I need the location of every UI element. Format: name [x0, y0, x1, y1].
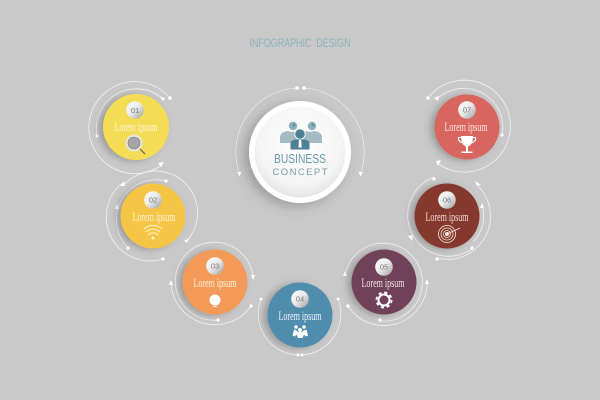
panel: step 01: 01 — [131, 106, 139, 115]
panel: step 01: Lorem ipsum — [114, 120, 158, 134]
panel: step 02: Lorem ipsum — [132, 210, 176, 224]
panel: step 05 — [343, 243, 429, 326]
icon: gear — [376, 292, 392, 308]
panel: step 05: Lorem ipsum — [362, 276, 405, 290]
panel: central business concept — [236, 86, 364, 203]
panel: step 02: 02 — [149, 196, 157, 204]
icon: light bulb — [210, 294, 220, 307]
title: INFOGRAPHIC DESIGN — [250, 36, 350, 50]
icon: magnifier — [126, 134, 145, 154]
panel: step 02 — [106, 171, 198, 261]
panel: step 07: Lorem ipsum — [444, 120, 488, 134]
panel: step 06 — [408, 177, 490, 261]
panel: step 07 — [426, 80, 510, 172]
panel: step 04 — [258, 282, 341, 356]
icon: people — [292, 325, 308, 338]
panel: step 03: 03 — [211, 262, 219, 270]
panel: step 04: Lorem ipsum — [278, 309, 322, 323]
icon: wifi — [144, 225, 162, 240]
icon: business people — [280, 122, 322, 150]
panel: step 01 — [89, 82, 172, 174]
panel: step 03: Lorem ipsum — [194, 276, 237, 290]
icon: trophy — [458, 136, 476, 153]
heading: concept: CONCEPT — [272, 167, 328, 178]
panel: step 03 — [169, 242, 255, 325]
panel: step 06: Lorem ipsum — [426, 210, 469, 224]
icon: target — [438, 226, 460, 242]
heading: business: BUSINESS — [274, 152, 326, 166]
panel: step 04: 04 — [296, 294, 304, 304]
panel: step 05: 05 — [380, 262, 388, 272]
panel: step 07: 07 — [463, 106, 471, 114]
panel: step 06: 06 — [443, 196, 451, 204]
